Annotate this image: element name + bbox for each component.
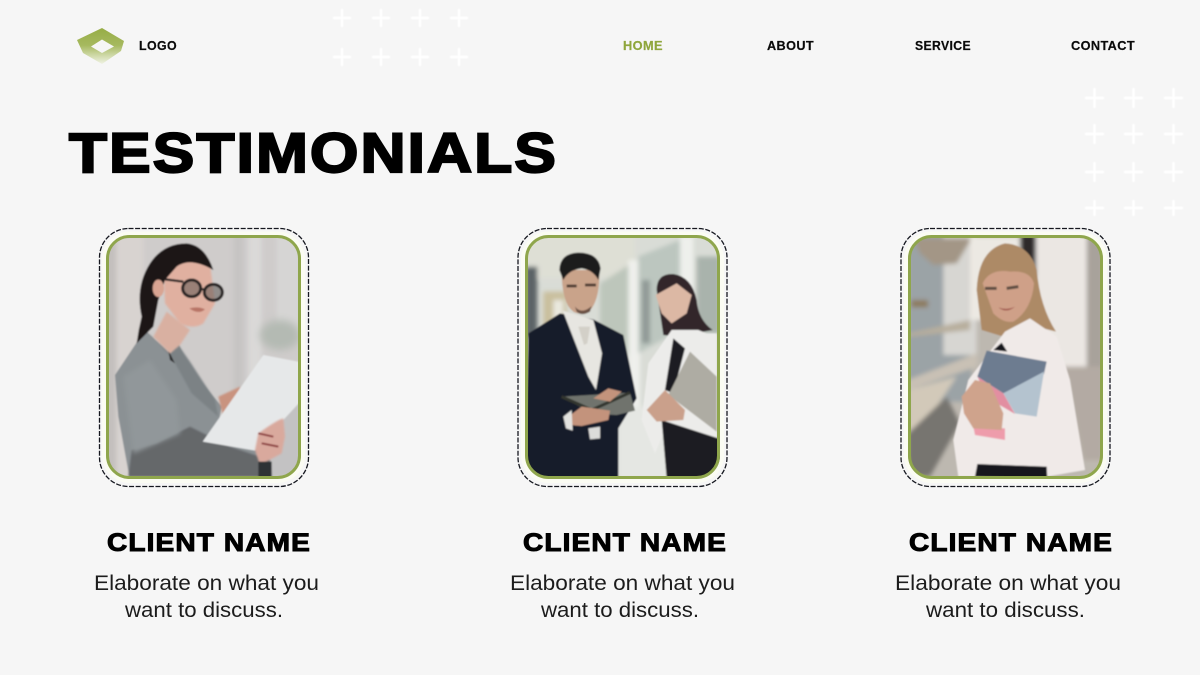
description: want to discuss. (925, 599, 1085, 622)
decorative plus pattern top (333, 9, 468, 66)
logo label: LOGO (139, 38, 177, 53)
description: want to discuss. (540, 599, 699, 622)
dashed outline (518, 228, 727, 486)
photo: man and woman in office (525, 235, 723, 478)
client name: CLIENT NAME (523, 529, 727, 557)
title: TESTIMONIALS (69, 121, 558, 184)
nav: service: SERVICE (915, 38, 971, 53)
description (94, 572, 319, 622)
panel: testimonial 1 (94, 228, 319, 622)
description (510, 572, 735, 622)
photo: blonde woman holding laptop (908, 235, 1103, 478)
panel: testimonial 3 (895, 228, 1121, 622)
nav: about: ABOUT (767, 38, 814, 53)
photo frame (104, 234, 303, 481)
photo frame (906, 234, 1105, 481)
description: Elaborate on what you (895, 572, 1121, 595)
nav: contact: CONTACT (1071, 38, 1135, 53)
nav: home: HOME (623, 38, 663, 53)
description (895, 572, 1121, 622)
client name: CLIENT NAME (107, 529, 311, 557)
photo: woman with glasses holding paper (106, 235, 303, 478)
description: Elaborate on what you (94, 572, 319, 595)
description: Elaborate on what you (510, 572, 735, 595)
decorative plus pattern right (1085, 88, 1183, 216)
description: want to discuss. (124, 599, 283, 622)
icon: logo (77, 28, 124, 64)
client name: CLIENT NAME (909, 529, 1113, 557)
dashed outline (100, 228, 308, 486)
panel: testimonial 2 (510, 228, 735, 622)
photo frame (523, 234, 722, 481)
dashed outline (901, 228, 1110, 486)
navigation (623, 38, 1135, 53)
